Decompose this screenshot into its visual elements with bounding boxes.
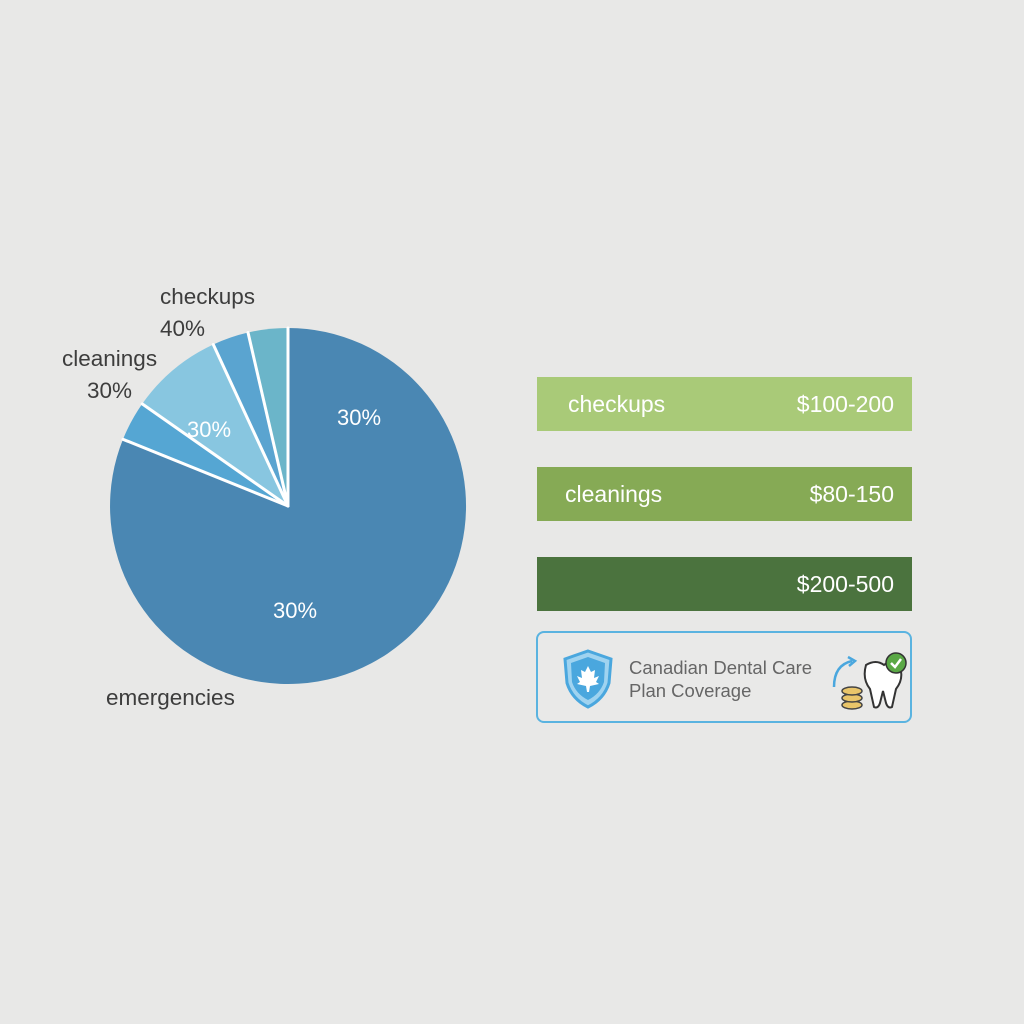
label: checkups: 40% [160,316,205,341]
text: coverage [629,657,812,701]
label: checkups [160,284,255,341]
pie value labels: 30% [273,598,317,623]
icon: shield maple leaf [563,649,613,709]
bar: emergencies [537,557,912,611]
label: cleanings: 30% [87,378,132,403]
slice: emergencies [110,328,466,684]
bar: emergencies: $200-500 [797,571,894,597]
label: checkups: checkups [160,284,255,309]
label: cleanings: cleanings [62,346,157,371]
slice: small blue [213,332,288,506]
label: cleanings [62,346,157,403]
bar: cleanings: cleanings [565,481,662,507]
bar: checkups: checkups [568,391,665,417]
pie value labels: 30% [337,405,381,430]
bar: cleanings: $80-150 [810,481,894,507]
pie value labels [187,405,381,623]
slice: teal [248,328,288,506]
bar: checkups: $100-200 [797,391,894,417]
text: coverage: Canadian Dental Care [629,657,812,678]
text: coverage: Plan Coverage [629,680,751,701]
bar: checkups [537,377,912,431]
icon: tooth with coins [832,652,907,710]
callout: coverage [536,631,912,723]
slice: checkups [142,344,288,506]
pie value labels: 30% [187,417,231,442]
slice: cleanings [123,404,288,506]
bar: cleanings [537,467,912,521]
label: emergencies: emergencies [106,685,235,710]
